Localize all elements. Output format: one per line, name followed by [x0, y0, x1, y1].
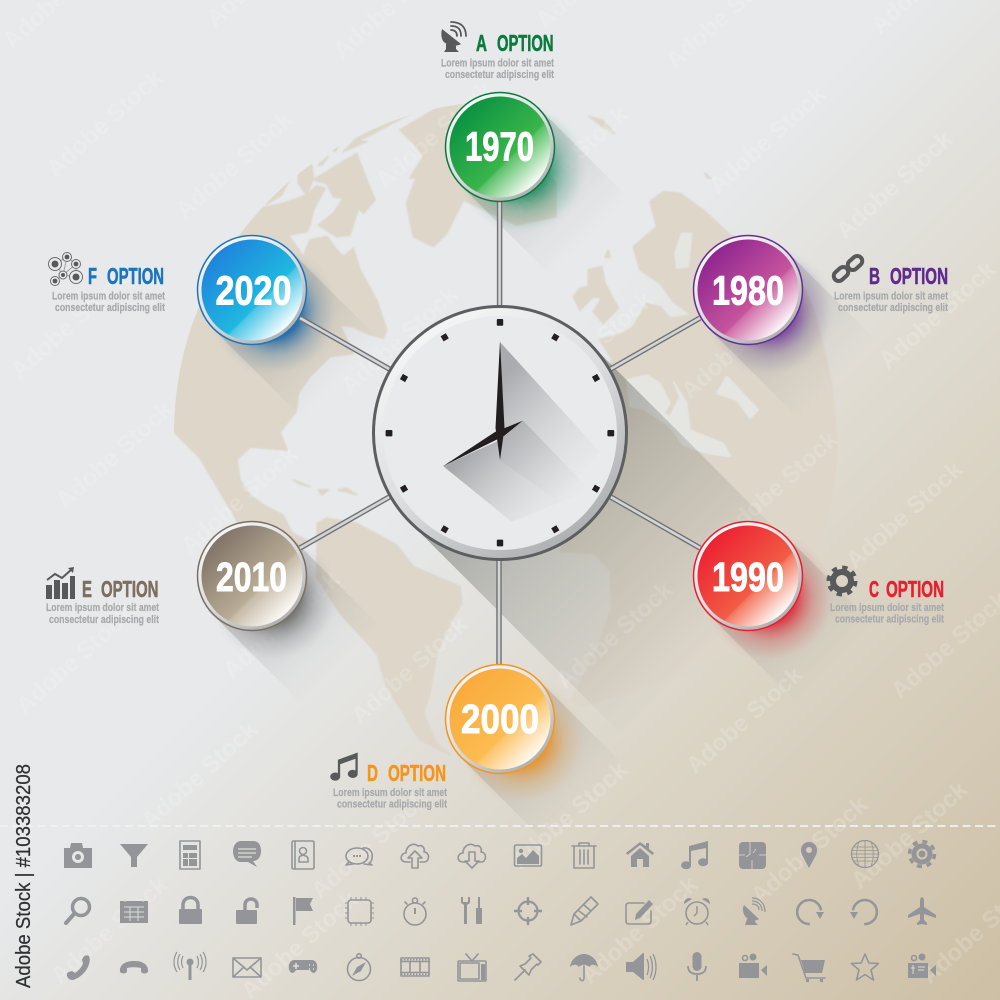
icon: gear [828, 568, 856, 594]
label block D: Lorem ipsum dolor sit amet [333, 787, 447, 799]
label block A: Lorem ipsum dolor sit amet [441, 58, 554, 70]
watermarks: Adobe Stock [176, 441, 304, 559]
label block A: A [476, 30, 487, 56]
icon: magnifier [66, 898, 90, 923]
icon: speaker [626, 953, 656, 980]
dashed divider [0, 825, 1000, 827]
watermarks: Adobe Stock [46, 871, 174, 989]
label block F: Lorem ipsum dolor sit amet [52, 290, 165, 302]
icon: undo arrow [850, 898, 878, 926]
icon: edit note [626, 900, 653, 924]
watermarks: Adobe Stock [171, 106, 299, 224]
watermarks: Adobe Stock [371, 76, 499, 194]
year circle: 1970 [446, 92, 554, 202]
label block D: D [367, 760, 378, 786]
label block E [46, 567, 159, 626]
icon: cloud download [458, 844, 486, 868]
icon: push pin [515, 954, 541, 980]
watermarks: Adobe Stock [846, 776, 974, 894]
label block E: OPTION [101, 576, 158, 602]
label block C: C [869, 576, 879, 602]
label block D [330, 752, 447, 810]
watermarks: Adobe Stock [6, 266, 134, 384]
icon: chain link [832, 254, 864, 283]
icon: film strip [401, 958, 429, 976]
label block D: consectetur adipiscing elit [337, 798, 447, 810]
label block E: consectetur adipiscing elit [49, 614, 159, 626]
year circle: 1990 [694, 522, 802, 630]
icon: microchip [345, 897, 374, 926]
label block F: OPTION [107, 263, 164, 289]
year circle: 1990: 1990 [712, 554, 784, 600]
icon: alarm clock [684, 898, 710, 925]
watermarks: Adobe Stock [136, 716, 264, 834]
icon: microphone [688, 952, 706, 981]
icon: redo arrow [796, 898, 824, 926]
icon: star [852, 954, 878, 980]
icon: hang up phone [120, 961, 148, 974]
eurasia and africa [560, 172, 836, 656]
icon: pencil [571, 897, 598, 925]
watermarks: Adobe Stock [841, 456, 969, 574]
clock tick marks [386, 319, 614, 546]
icon: wrench and screwdriver [461, 897, 482, 924]
watermarks: Adobe Stock [346, 611, 474, 729]
icon: cloud upload [401, 844, 428, 868]
label block C [828, 568, 944, 626]
icon: chat bubbles [346, 848, 372, 865]
icon: gear [910, 842, 934, 866]
long shadow: 2000 [460, 679, 627, 846]
clock hand long shadows [443, 342, 600, 522]
icon: shopping cart [793, 954, 825, 982]
icon: television [458, 954, 486, 981]
icon: stopwatch [404, 898, 426, 925]
watermarks: Adobe Stock [41, 64, 169, 182]
label block A: consectetur adipiscing elit [445, 69, 554, 81]
long shadow: 2020 [212, 250, 379, 417]
stock id vertical text: Adobe Stock | #103383208 [13, 764, 35, 988]
icon: umbrella [570, 954, 598, 981]
year circle: 2010 [198, 522, 306, 630]
watermarks: Adobe Stock [551, 576, 679, 694]
icon: picture [514, 845, 542, 866]
label block E: Lorem ipsum dolor sit amet [46, 602, 159, 614]
watermarks: Adobe Stock [506, 756, 634, 874]
icon: envelope [233, 958, 261, 977]
icon: calculator [180, 841, 200, 869]
watermarks: Adobe Stock [676, 286, 804, 404]
watermarks: Adobe Stock [874, 256, 1000, 374]
icon: trash can [572, 843, 596, 868]
long shadow: 2010 [212, 536, 379, 703]
long shadow: 1980 [708, 250, 875, 417]
year circle: 2000 [446, 664, 554, 774]
label block B: B [869, 263, 880, 289]
watermarks: Adobe Stock [51, 396, 179, 514]
icon: open lock [236, 899, 257, 924]
icon: crosshair [514, 897, 542, 925]
label block A [441, 22, 554, 81]
watermarks: Adobe Stock [576, 871, 704, 989]
icon: gamepad [289, 960, 317, 973]
icon: closed lock [179, 898, 202, 924]
watermarks: Adobe Stock [746, 791, 874, 909]
icon: music note [330, 752, 358, 781]
year circle: 1970: 1970 [465, 124, 534, 170]
icon: speech bubble [233, 841, 261, 867]
icon: antenna signal [174, 952, 206, 980]
label block B: consectetur adipiscing elit [838, 302, 948, 314]
label block A: OPTION [497, 30, 554, 56]
long shadow: 1990 [708, 536, 875, 703]
year circle: 1980: 1980 [712, 268, 784, 314]
icon: camera [64, 843, 92, 868]
long shadow: 1970 [460, 107, 627, 274]
label block F: consectetur adipiscing elit [55, 302, 165, 314]
watermarks: Adobe Stock [531, 286, 659, 404]
icon: video camera [739, 954, 767, 978]
icon: airplane [908, 897, 936, 925]
year circle: 2020 [198, 236, 306, 344]
label block F: F [88, 263, 97, 289]
icon: telephone [67, 955, 90, 980]
icon: house [626, 842, 654, 867]
icon: wire globe [852, 840, 878, 868]
label block D: OPTION [388, 760, 446, 786]
label block E: E [82, 576, 92, 602]
icon: satellite dish [743, 898, 765, 925]
label block F [48, 252, 165, 314]
world map globe [170, 100, 840, 755]
icon grid [64, 840, 936, 982]
icon: clock tile [739, 842, 766, 869]
icon: contact book [292, 841, 314, 869]
year circle: 2000: 2000 [461, 696, 539, 742]
central clock [374, 306, 626, 560]
icon: video projector [908, 954, 936, 978]
label block C: consectetur adipiscing elit [835, 614, 944, 626]
label block C: OPTION [886, 576, 944, 602]
icon: map pin [801, 842, 817, 868]
icon: compass [348, 954, 370, 980]
north america and greenland [170, 100, 556, 560]
watermarks: Adobe Stock [218, 566, 346, 684]
watermarks: Adobe Stock [506, 101, 634, 219]
label block B: OPTION [890, 263, 948, 289]
icon: satellite dish [441, 22, 466, 52]
icon: music notes [681, 841, 708, 869]
watermarks: Adobe Stock [704, 81, 832, 199]
icon: flag [293, 897, 313, 925]
icon: funnel [120, 844, 148, 867]
icon: calendar [120, 897, 148, 923]
year circle: 2010: 2010 [216, 554, 287, 600]
connector spokes [300, 200, 700, 670]
watermarks: Adobe Stock [11, 601, 139, 719]
year circle: 2020: 2020 [216, 268, 292, 314]
watermarks: Adobe Stock [831, 126, 959, 244]
icon: bar chart [46, 567, 75, 599]
year circle: 1980 [694, 236, 802, 344]
watermarks: Adobe Stock [306, 786, 434, 904]
label block C: Lorem ipsum dolor sit amet [830, 602, 944, 614]
arctic sliver [588, 116, 615, 134]
label block B [832, 254, 948, 314]
clock hands [443, 341, 523, 466]
south america [293, 480, 462, 755]
watermarks: Adobe Stock [336, 281, 464, 399]
icon: people network [48, 252, 82, 286]
watermarks: Adobe Stock [681, 661, 809, 779]
long shadow: clock [410, 343, 802, 735]
label block B: Lorem ipsum dolor sit amet [834, 290, 948, 302]
watermarks: Adobe Stock [716, 426, 844, 544]
